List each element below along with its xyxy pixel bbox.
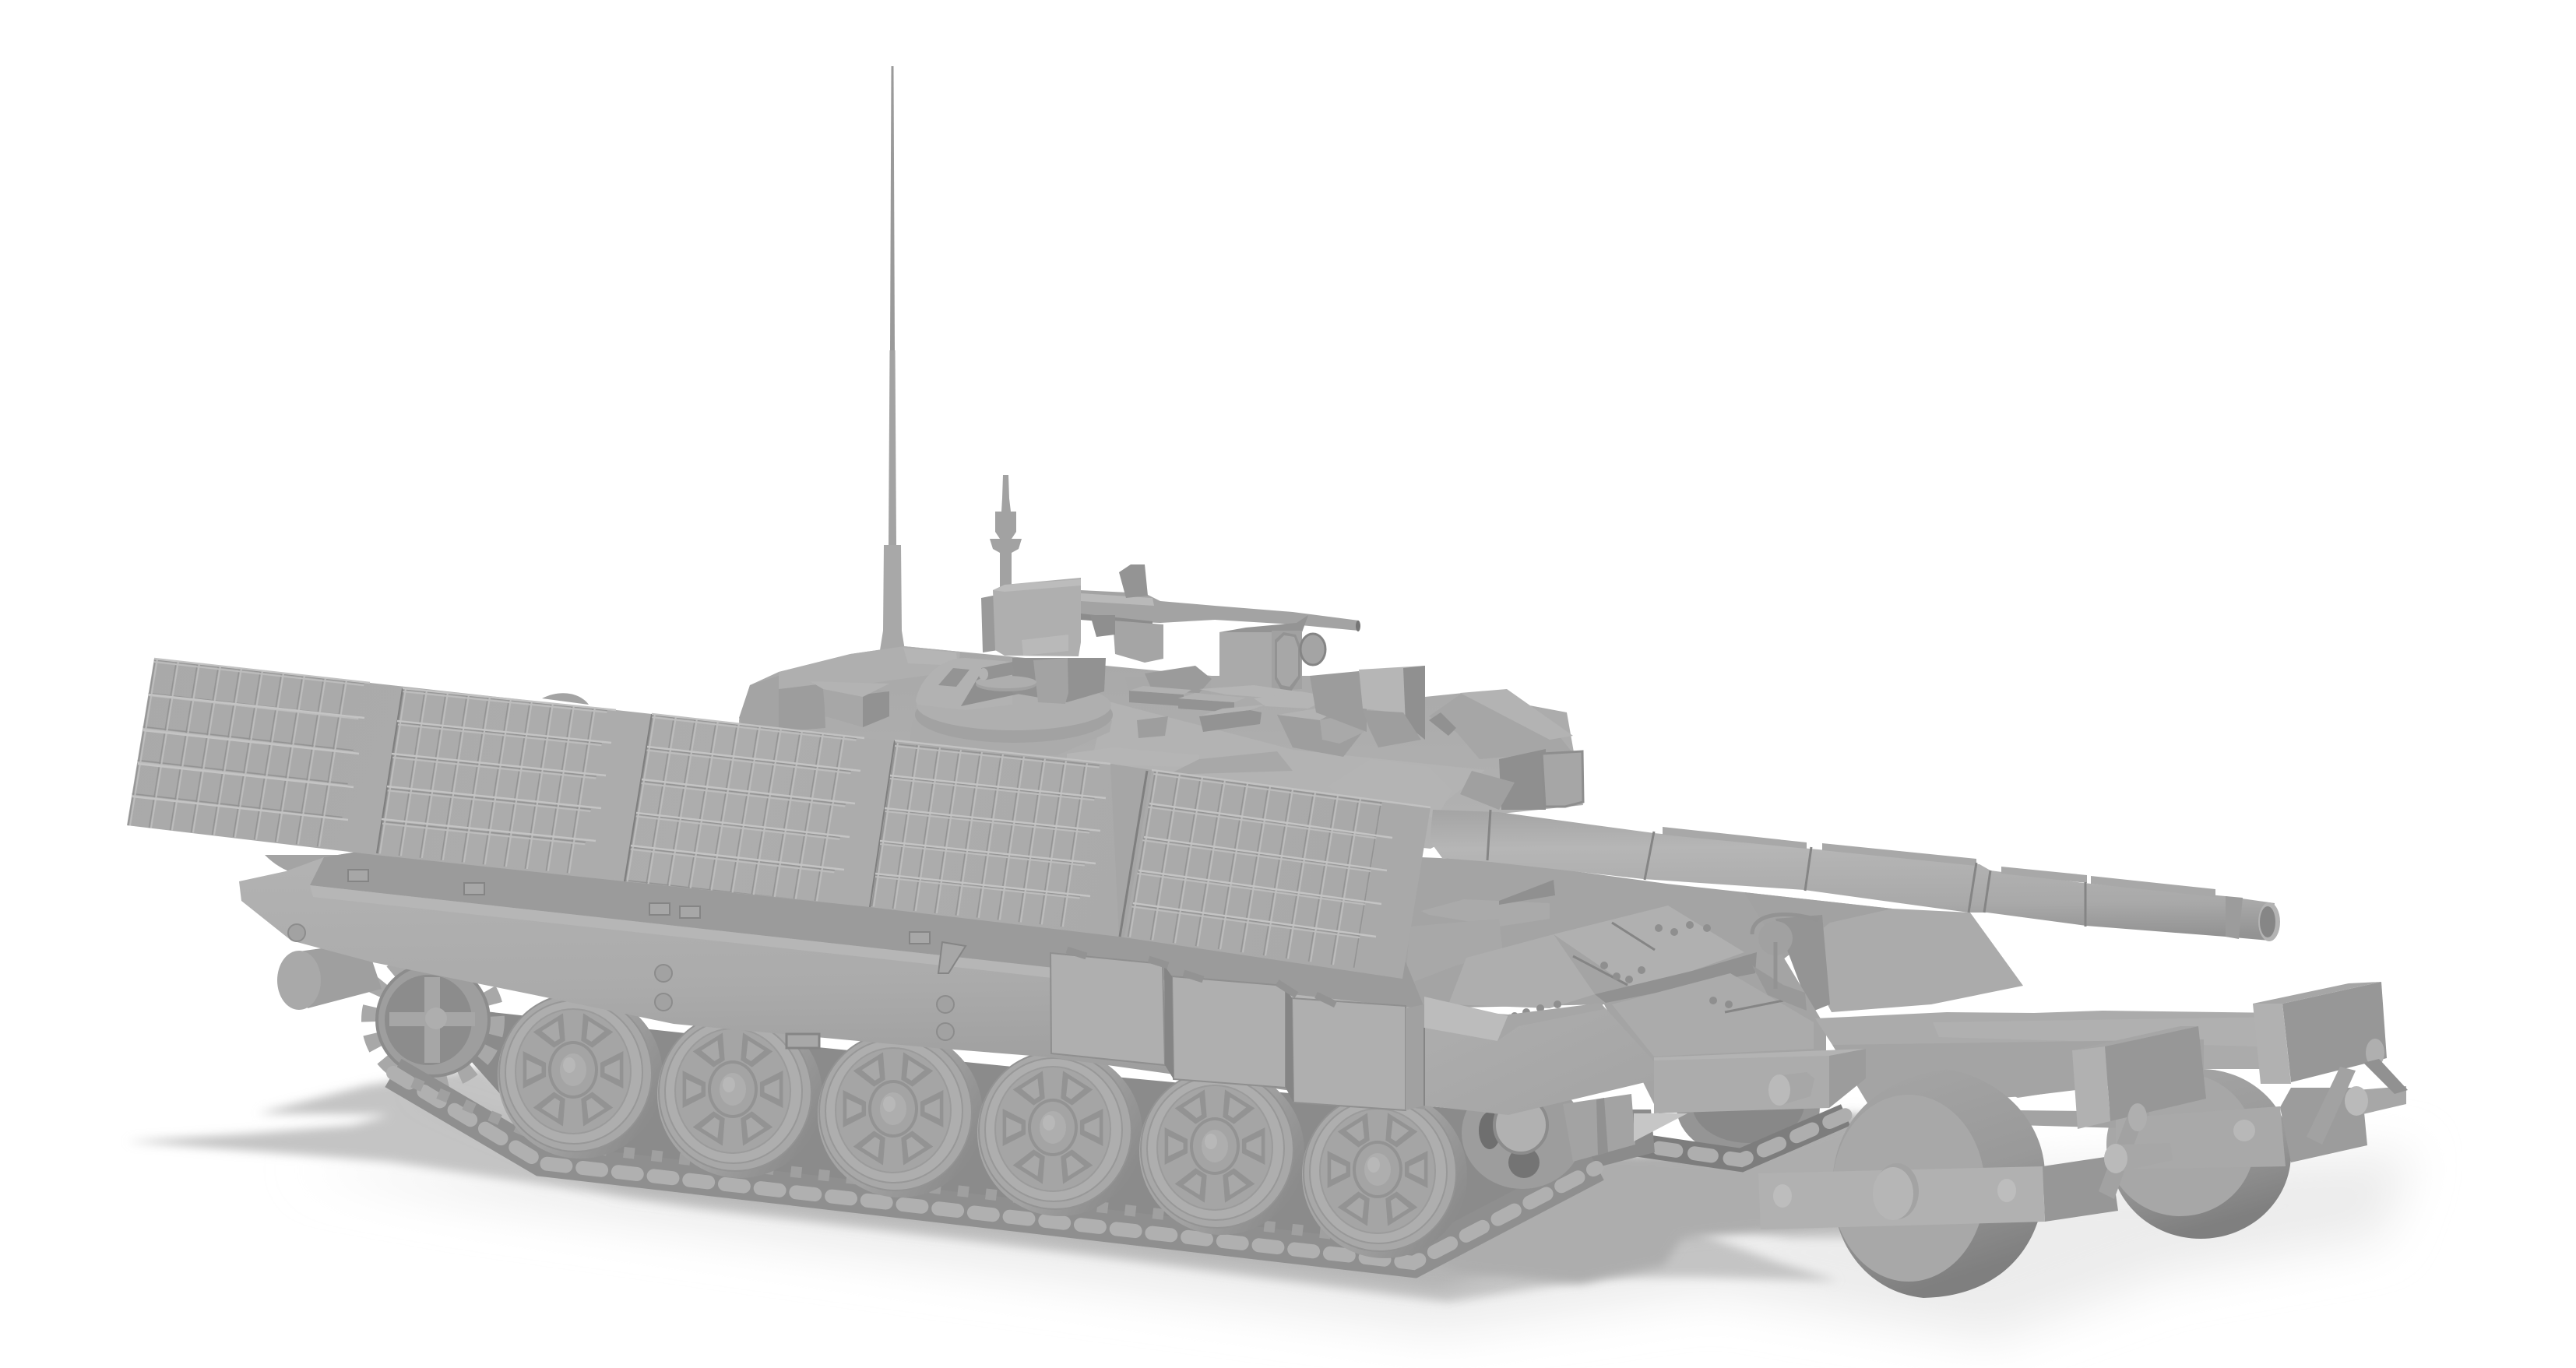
rear fuel drum — [277, 942, 382, 1010]
skirt panel 5 grid — [1127, 771, 1382, 968]
deck plates behind skirt — [1421, 899, 1550, 927]
main gun — [1430, 810, 2280, 941]
right plough block — [2253, 982, 2387, 1084]
turret main body — [739, 646, 1583, 849]
side skirt with grid armour — [127, 659, 1431, 979]
gunner's sight hood — [1310, 666, 1425, 747]
glacis plate upper — [1554, 906, 1744, 986]
dark rail band — [310, 849, 1425, 1009]
glacis plate lower left — [1448, 934, 1595, 1008]
front arm with bolts — [1758, 1156, 2118, 1229]
underbelly and inner running gear — [421, 1004, 1655, 1242]
commander's cupola — [907, 658, 1113, 755]
mine plough assembly — [1654, 982, 2408, 1298]
right hinge — [2307, 1039, 2408, 1145]
front plough wheel — [1832, 1069, 2045, 1298]
rivets — [1511, 921, 1733, 1020]
tow bracket — [787, 1034, 819, 1048]
add-on armour boxes — [1050, 950, 1406, 1110]
middle hinge — [2099, 1103, 2173, 1199]
mantlet shoulder — [1328, 759, 1452, 818]
track run — [393, 1073, 1596, 1263]
clamp hardware — [1752, 965, 1807, 1011]
antenna mast — [867, 66, 917, 699]
left arm with peg — [1654, 1049, 1866, 1113]
stowage rail — [1595, 952, 1757, 1003]
reactive armour bricks — [1067, 685, 1364, 775]
near front fender — [1406, 997, 1668, 1115]
cross tube — [2017, 1110, 2149, 1129]
skirt panel 1 grid — [127, 659, 364, 849]
skirt panel 3 grid — [625, 714, 857, 902]
hull front glacis — [1402, 856, 1826, 1113]
skirt panel 4 grid — [871, 743, 1100, 928]
far front fender — [1744, 892, 2023, 1012]
gun barrel — [1430, 810, 2275, 941]
rods — [132, 695, 1392, 937]
top edge highlight — [154, 659, 1431, 807]
periscope mast — [990, 475, 1022, 592]
machine gun — [1081, 564, 1360, 663]
skirt panel 2 grid — [377, 688, 607, 874]
smoke launcher bank — [1429, 689, 1573, 759]
track plates over idler — [1563, 1094, 1687, 1162]
sight box and mount — [976, 658, 1106, 704]
fender strip — [310, 885, 1425, 1020]
sprocket wheel — [369, 958, 497, 1082]
machine gun box — [981, 578, 1081, 656]
hull bolts — [288, 924, 954, 1040]
turret — [739, 475, 1583, 849]
middle plough block — [2072, 1026, 2206, 1129]
rear wheel of plough — [2106, 1069, 2291, 1239]
mid arm — [2116, 1088, 2367, 1169]
rear stowage boxes — [739, 646, 960, 740]
ground shadow — [127, 1067, 2414, 1339]
sensor mesh and round optic — [1460, 749, 1583, 810]
far side track and road wheel — [1624, 1056, 1846, 1160]
glacis plate lower right — [1612, 973, 1814, 1057]
upper beam — [1815, 1011, 2286, 1098]
rail clips — [348, 870, 966, 973]
road wheels — [498, 992, 1467, 1258]
muzzle — [2226, 896, 2243, 939]
panel seams — [377, 688, 895, 907]
idler wheel — [1462, 1077, 1583, 1189]
hull side — [239, 849, 1425, 1110]
rear hull curve behind skirt — [265, 855, 343, 874]
loader's box with octagonal sight — [1125, 615, 1325, 697]
